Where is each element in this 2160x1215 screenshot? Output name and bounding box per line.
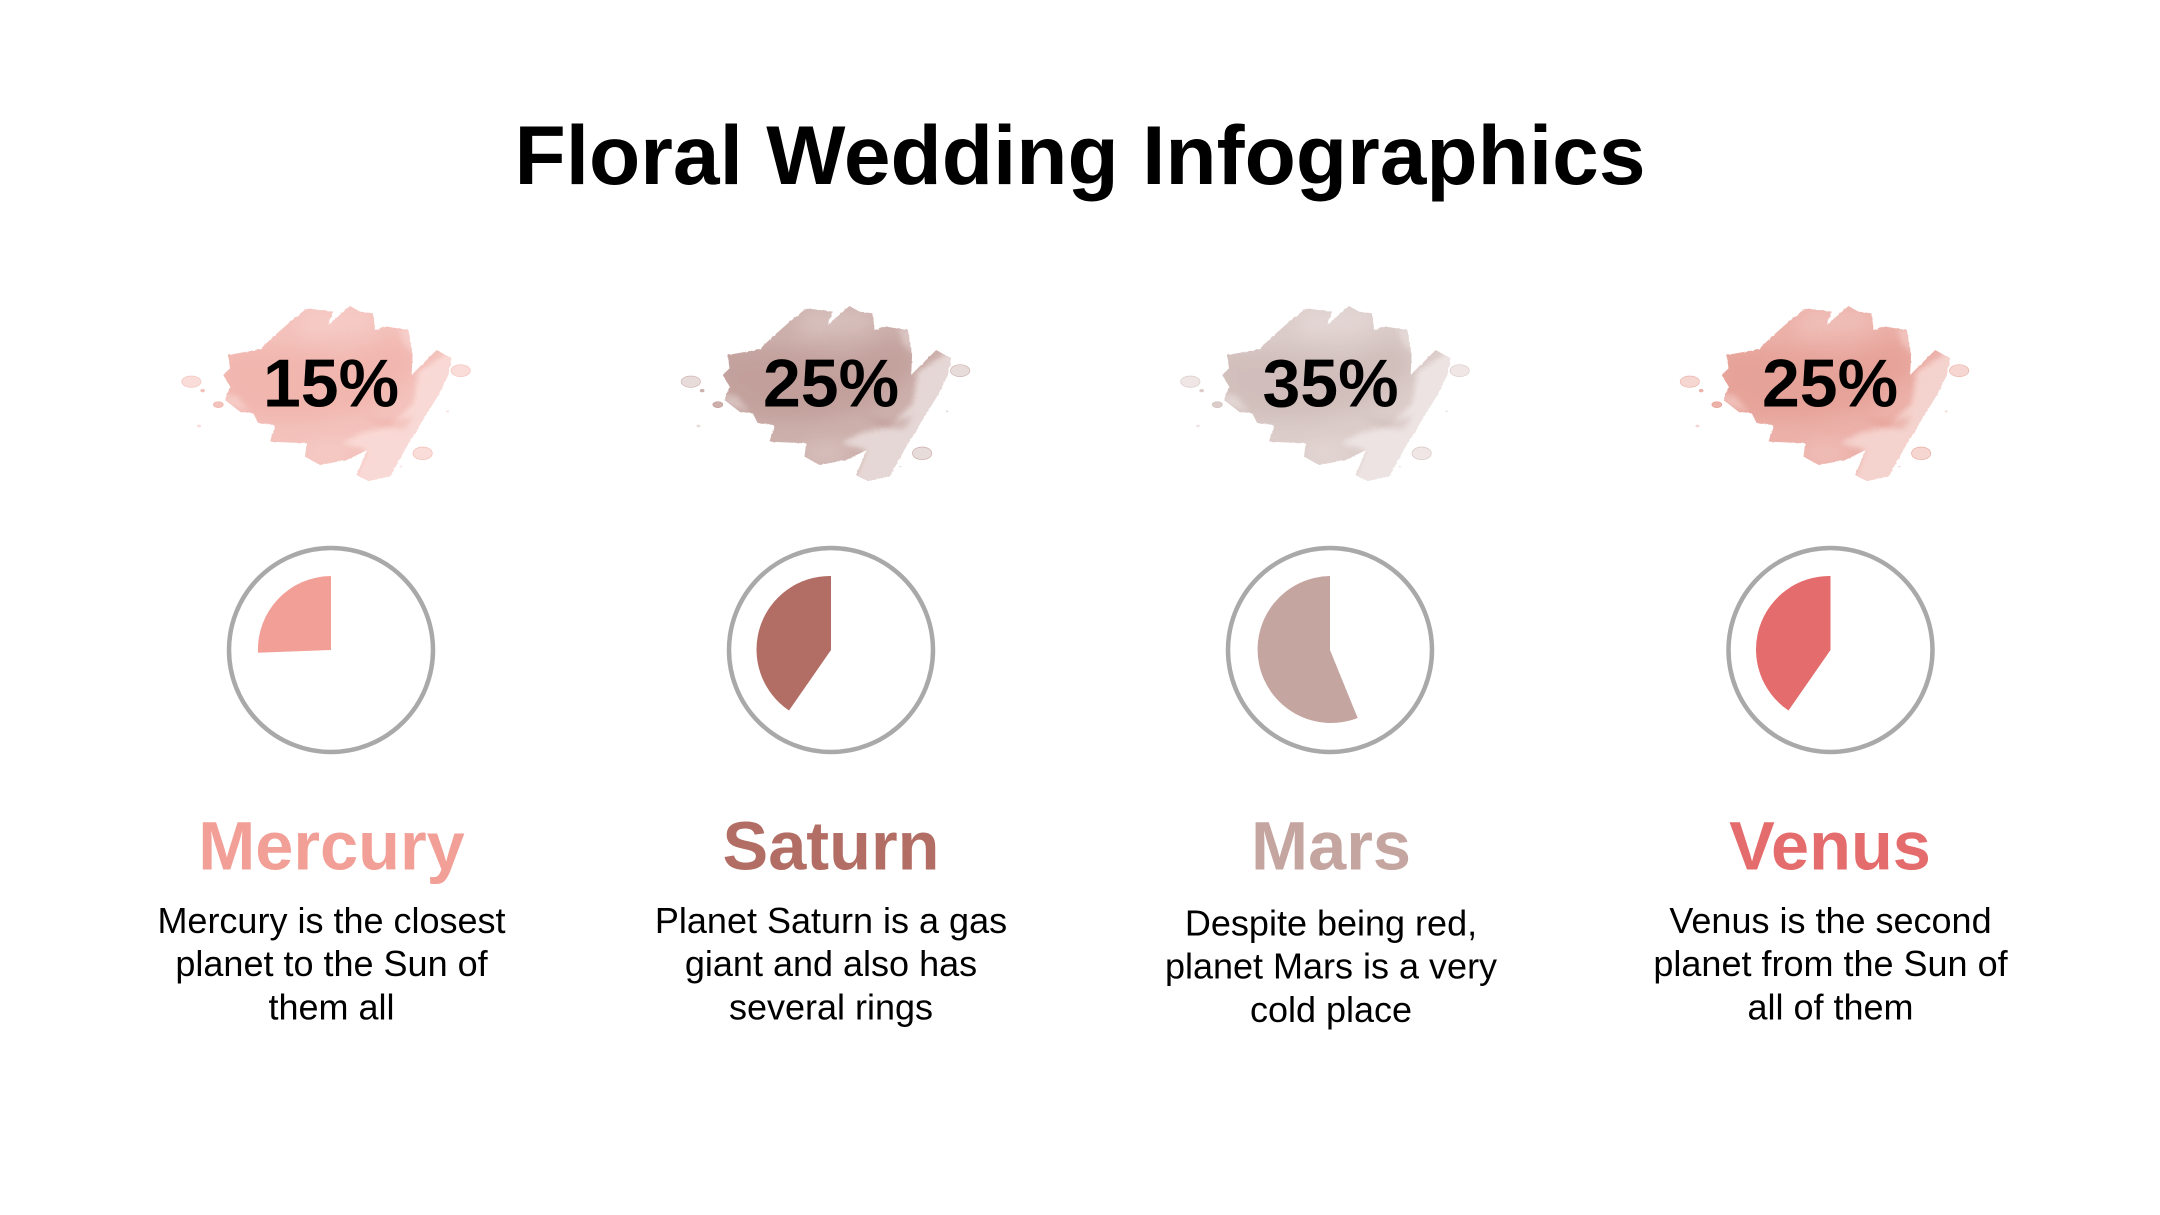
text: Mercury description: planet to the Sun of <box>175 943 489 984</box>
pie chart: 25% <box>1728 548 1932 752</box>
text: Venus description: planet from the Sun of <box>1653 943 2009 984</box>
pie chart: 15% <box>229 548 433 752</box>
text: Mars description: Despite being red, <box>1185 902 1477 944</box>
text: Mercury description: Mercury is the closest <box>157 900 506 941</box>
text: Mercury description <box>157 900 506 1028</box>
icon: watercolor splash with 35%: 35% <box>1262 346 1399 422</box>
panel: Mars <box>1165 303 1497 1030</box>
text: Venus description: Venus is the second <box>1669 900 1992 941</box>
heading: Venus: Venus <box>1729 808 1931 884</box>
text: Mars description: planet Mars is a very <box>1165 946 1497 986</box>
text: Saturn description: giant and also has <box>685 943 977 984</box>
text: Saturn description: Planet Saturn is a gas <box>655 900 1007 941</box>
text: Saturn description <box>655 900 1007 1028</box>
pie chart: 35% <box>1228 548 1432 752</box>
icon: watercolor splash with 15%: 15% <box>263 346 399 422</box>
icon: watercolor splash with 35% <box>1181 303 1469 487</box>
heading: Mars: Mars <box>1251 808 1411 884</box>
heading: Saturn: Saturn <box>723 808 939 884</box>
panel: Mercury <box>157 303 506 1028</box>
text: Venus description: all of them <box>1747 986 1914 1028</box>
panel: Venus <box>1653 303 2009 1028</box>
icon: watercolor splash with 15% <box>182 303 470 487</box>
text: Mars description <box>1165 902 1497 1030</box>
icon: watercolor splash with 25%: 25% <box>1762 346 1898 422</box>
icon: watercolor splash with 25% <box>1680 303 1969 487</box>
text: Saturn description: several rings <box>729 986 933 1028</box>
icon: watercolor splash with 25%: 25% <box>763 346 899 422</box>
text: Mercury description: them all <box>268 986 395 1028</box>
icon: watercolor splash with 25% <box>681 303 970 487</box>
pie chart: 25% <box>729 548 933 752</box>
text: Venus description <box>1653 900 2009 1028</box>
title: Floral Wedding Infographics <box>514 108 1646 202</box>
panel: Saturn <box>655 303 1007 1028</box>
heading: Mercury: Mercury <box>198 808 465 884</box>
text: Mars description: cold place <box>1250 989 1412 1030</box>
